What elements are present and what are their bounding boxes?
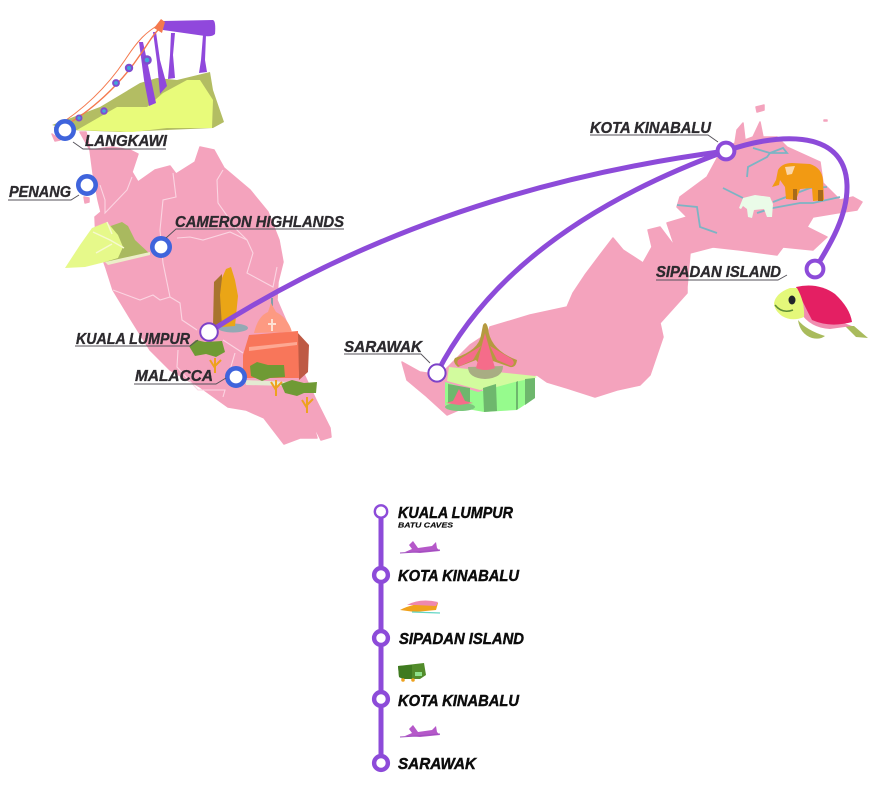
marker: Sarawak bbox=[428, 364, 446, 382]
label: Penang: PENANG bbox=[9, 184, 71, 201]
route: Sarawak to Kota Kinabalu bbox=[437, 151, 726, 373]
label: Sarawak: SARAWAK bbox=[344, 339, 423, 356]
route: Kota Kinabalu to Sipadan Island bbox=[726, 139, 847, 269]
marker: Sipadan Island bbox=[807, 261, 823, 277]
icon: plane bbox=[400, 725, 440, 737]
label: Cameron Highlands: CAMERON HIGHLANDS bbox=[175, 214, 344, 231]
timeline: itinerary bbox=[374, 505, 524, 773]
icon: sea turtle bbox=[774, 286, 868, 339]
icon: Cameron Highlands tea hills bbox=[65, 222, 150, 268]
stop: Kuala Lumpur: KUALA LUMPUR bbox=[398, 505, 513, 522]
icon: bus bbox=[398, 663, 426, 682]
stop: Sarawak: SARAWAK bbox=[398, 756, 477, 773]
label: Kota Kinabalu: KOTA KINABALU bbox=[590, 120, 711, 137]
icon: boat bbox=[400, 601, 440, 613]
icon: Batu Caves statue bbox=[213, 267, 248, 332]
marker: Malacca bbox=[227, 368, 245, 386]
icon: white elephant bbox=[739, 195, 773, 218]
label: Malacca: MALACCA bbox=[135, 368, 213, 385]
label: Kuala Lumpur: KUALA LUMPUR bbox=[76, 331, 190, 348]
map: Borneo, Sarawak and Sabah bbox=[402, 105, 862, 415]
icon: Langkawi sky bridge and mountain bbox=[52, 19, 224, 132]
rivers bbox=[677, 148, 840, 233]
label: Sarawak bbox=[344, 339, 430, 363]
marker: Penang bbox=[78, 176, 96, 194]
stop: Kota Kinabalu: KOTA KINABALU bbox=[398, 568, 519, 585]
stop: Kota Kinabalu: KOTA KINABALU bbox=[398, 693, 519, 710]
icon: Malacca church and trees bbox=[189, 298, 317, 413]
marker: Langkawi bbox=[56, 121, 74, 139]
state borders bbox=[100, 170, 277, 397]
label: Langkawi: LANGKAWI bbox=[85, 133, 168, 150]
stop: Kuala Lumpur bbox=[375, 505, 513, 530]
label: Sipadan Island: SIPADAN ISLAND bbox=[656, 264, 781, 281]
route: Kuala Lumpur to Kota Kinabalu bbox=[209, 151, 726, 332]
icon: orange elephant bbox=[772, 163, 824, 201]
marker: Kota Kinabalu bbox=[718, 143, 734, 159]
map: Peninsular Malaysia bbox=[52, 132, 331, 444]
icon: Sarawak assembly building bbox=[445, 323, 537, 412]
timeline line bbox=[378, 518, 384, 763]
marker: Kuala Lumpur bbox=[200, 323, 218, 341]
label: Cameron Highlands bbox=[166, 214, 344, 238]
stop: Sipadan Island: SIPADAN ISLAND bbox=[399, 631, 524, 648]
marker: Cameron Highlands bbox=[152, 238, 170, 256]
icon: plane bbox=[400, 541, 440, 553]
stop: Kuala Lumpur: BATU CAVES bbox=[398, 520, 453, 530]
